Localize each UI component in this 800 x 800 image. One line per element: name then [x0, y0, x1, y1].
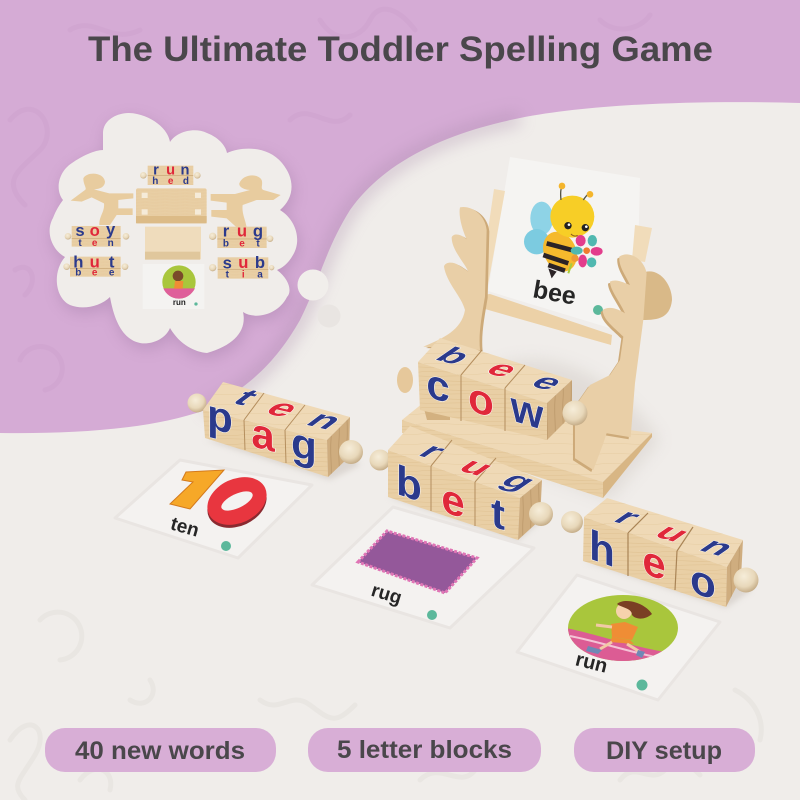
front letters: bet: e: [441, 474, 465, 529]
feature pill: 5 letter blocks: 5 letter blocks: [337, 736, 512, 764]
feature pill: 40 new words: [45, 728, 276, 772]
top letters: rug: r: [411, 438, 456, 463]
stand right mini: [211, 175, 281, 227]
thought cloud panel: [50, 113, 341, 358]
front letters: bet: b: [396, 457, 422, 512]
top letters: ten: n: [298, 406, 353, 434]
block hut/bee: u: [90, 252, 100, 271]
word: rug: rug: [369, 580, 404, 609]
block run/hed: u: [166, 163, 175, 179]
block soy/ten: t: [78, 238, 82, 249]
feature pill: DIY setup: [574, 728, 755, 772]
block sub/tia: b: [255, 253, 265, 272]
spelling card: bee: [488, 157, 640, 336]
block rug/bet: r: [223, 222, 230, 241]
top letters: run: [606, 504, 745, 560]
block row: rug / bet: [370, 426, 553, 541]
front letters: heo: h: [589, 522, 615, 577]
thought bubble large: [298, 270, 328, 300]
top letters: run: r: [606, 504, 651, 529]
block rug/bet: b: [223, 239, 229, 250]
left foot: [423, 405, 450, 420]
title: The Ultimate Toddler Spelling Game: [88, 30, 713, 69]
block row: ten / pag: [188, 382, 363, 480]
card sheet: [115, 460, 312, 558]
block rug/bet: u: [237, 222, 247, 241]
block run/hed: h: [152, 176, 158, 187]
front letters: pag: p: [207, 390, 233, 444]
block rug/bet: [209, 222, 273, 250]
top letters: run: n: [692, 533, 745, 560]
block sub/tia: u: [238, 253, 248, 272]
purple top background: [0, 0, 800, 433]
feature pill: 40 new words: 40 new words: [75, 737, 245, 765]
row shadow: [205, 440, 360, 480]
card number badge: [427, 610, 437, 620]
top letters: ten: e: [257, 394, 310, 422]
block soy/ten: e: [92, 238, 98, 249]
block sub/tia: t: [226, 269, 230, 280]
block row: run / heo: [561, 498, 758, 610]
word: bee: bee: [531, 276, 578, 311]
purple squiggle pattern: [10, 9, 650, 390]
top letters: ten: t: [225, 384, 268, 410]
cloud shadow: [52, 118, 299, 358]
top letters: bee: [428, 343, 573, 395]
mini run card: run: [173, 298, 186, 307]
thought bubble small: [318, 304, 340, 328]
bee illustration: [524, 183, 603, 278]
card sheet: [312, 507, 534, 628]
front letters: bet: t: [491, 489, 505, 540]
block soy/ten: n: [108, 238, 114, 249]
card holder posts: [480, 189, 652, 285]
block run/hed: [140, 163, 201, 187]
front letters: heo: o: [690, 555, 716, 610]
block sub/tia: a: [257, 269, 263, 280]
top letters: bee: e: [523, 369, 573, 395]
front letters: cow: o: [468, 373, 494, 428]
block hut/bee: [63, 252, 128, 279]
front letters: pag: [207, 390, 317, 472]
card holder mini: [145, 227, 201, 260]
front letters: bet: [396, 457, 505, 540]
word: ten: ten: [168, 514, 201, 542]
block row: bee / cow: [418, 338, 573, 440]
block sub/tia: i: [242, 269, 245, 280]
feature pill: DIY setup: DIY setup: [606, 737, 722, 765]
card number badge: [221, 541, 231, 551]
card sheet: [517, 575, 720, 700]
cross bar: [478, 294, 612, 345]
top letters: ten: [225, 384, 353, 434]
block run/hed: e: [168, 176, 174, 187]
block rug/bet: g: [253, 222, 263, 241]
block sub/tia: s: [223, 254, 232, 273]
mini run card: [143, 264, 204, 309]
front letters: pag: a: [251, 409, 275, 462]
front letters: pag: g: [291, 418, 317, 472]
main toy stand: [397, 157, 672, 500]
block hut/bee: t: [109, 252, 115, 271]
top letters: rug: g: [493, 467, 546, 494]
block run/hed: r: [153, 163, 159, 179]
block hut/bee: e: [92, 268, 98, 279]
word: run: run: [573, 648, 610, 678]
wooden base mini: [136, 188, 207, 223]
card number badge: [636, 680, 648, 690]
card: ten: [115, 460, 312, 558]
block soy/ten: o: [90, 221, 100, 240]
base: [402, 403, 652, 498]
card number badge: [593, 305, 603, 315]
exploded toy parts: [63, 163, 281, 309]
front letters: cow: c: [426, 359, 450, 413]
block rug/bet: t: [256, 239, 260, 250]
runner illustration: [568, 595, 678, 661]
axle left: [397, 367, 413, 393]
stand shadow: [470, 360, 660, 500]
front letters: heo: [589, 522, 716, 610]
card: run: [568, 595, 678, 690]
top letters: rug: [411, 438, 546, 494]
block soy/ten: s: [75, 221, 85, 240]
stand back ear: [640, 271, 672, 320]
front letters: cow: [426, 359, 544, 440]
block run/hed: n: [181, 163, 190, 179]
front letters: cow: w: [510, 383, 544, 440]
top letters: run: u: [647, 519, 700, 546]
stand left mini: [71, 174, 133, 225]
cloud shape: [50, 113, 297, 353]
left antler stand piece: [423, 207, 489, 351]
number ten illustration: [170, 468, 274, 537]
block soy/ten: [65, 220, 129, 249]
bead of main stand: [562, 400, 588, 426]
top letters: bee: b: [428, 343, 480, 369]
front letters: heo: e: [642, 536, 666, 591]
block hut/bee: e: [109, 268, 115, 279]
rug illustration: [358, 531, 477, 593]
curve edge shadow: [205, 118, 520, 410]
right antler stand piece: [573, 254, 647, 472]
top letters: rug: u: [451, 453, 504, 480]
card sheet: [488, 157, 640, 336]
block hut/bee: b: [75, 268, 81, 279]
block soy/ten: y: [106, 220, 116, 239]
block rug/bet: e: [239, 239, 245, 250]
top letters: bee: e: [478, 356, 528, 382]
block run/hed: d: [183, 176, 189, 187]
background squiggle pattern: [10, 612, 761, 800]
card: rug: [312, 507, 534, 628]
block hut/bee: h: [73, 252, 83, 271]
block sub/tia: [209, 253, 274, 280]
feature pill: 5 letter blocks: [308, 728, 541, 772]
